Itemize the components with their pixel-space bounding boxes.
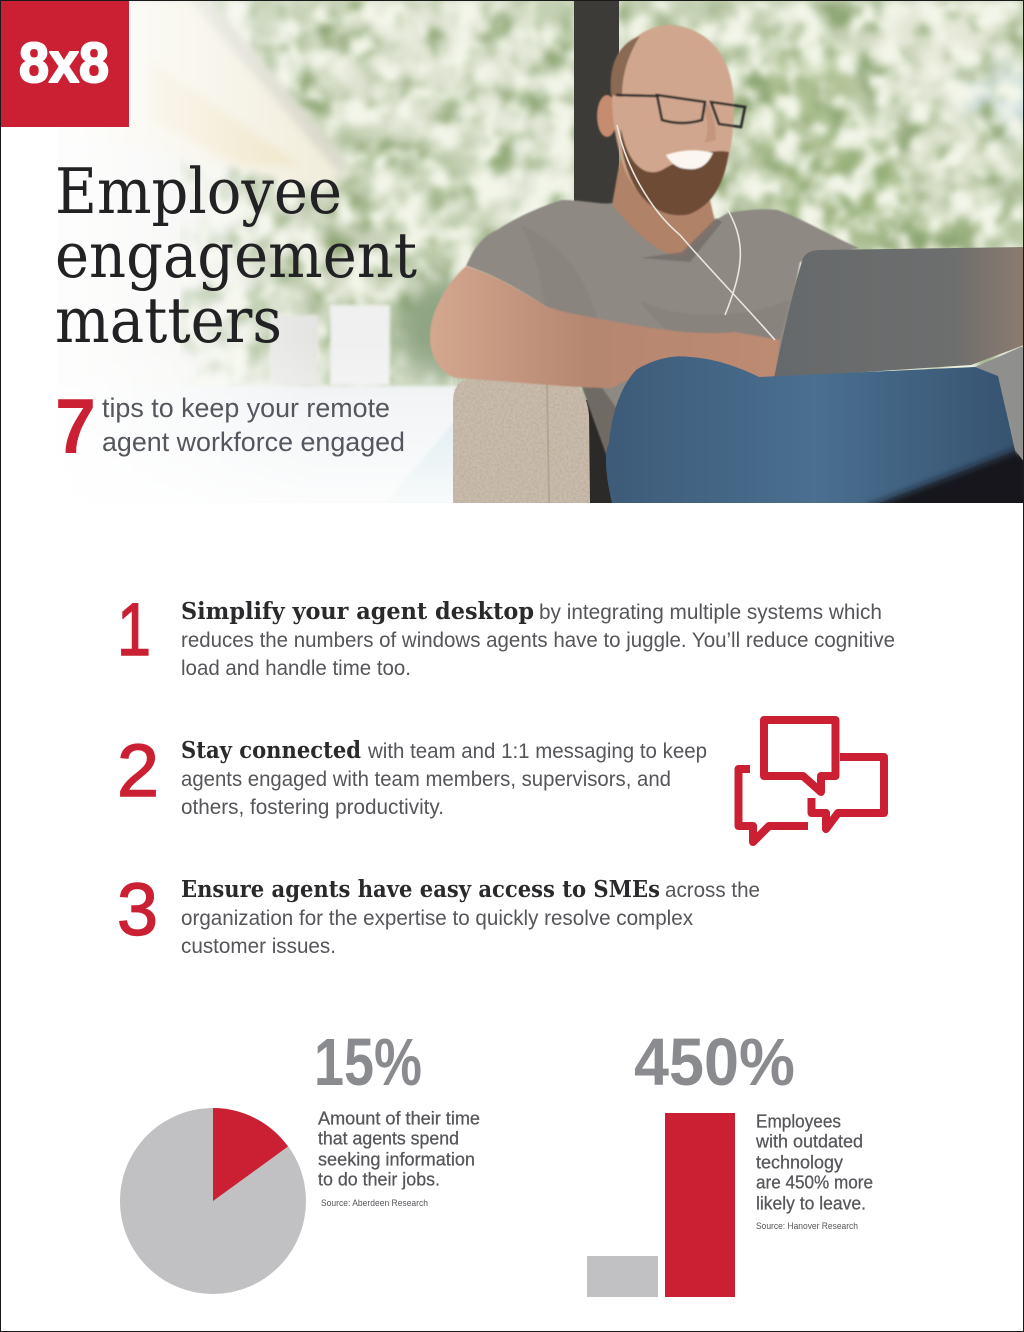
man: earphone cable [617, 125, 775, 340]
icon: chat bubbles [738, 720, 884, 842]
tip 2: 2 [117, 729, 159, 812]
title: engagement [55, 219, 417, 292]
tip 3: organization for the expertise to quickly resolve complex [181, 907, 693, 930]
stat: 450%: Employees [756, 1112, 841, 1132]
photo background: foliage through windows [57, 0, 1024, 503]
tip 1: 1 [117, 588, 151, 671]
tip 2: with team and 1:1 messaging to keep [367, 740, 707, 763]
stat: 15%: to do their jobs. [318, 1170, 440, 1190]
stat: 450%: Source: Hanover Research [756, 1221, 858, 1232]
tip 3 [117, 868, 760, 958]
logo: 8x8 [1, 0, 129, 127]
bar chart: 450% more likely to leave [587, 1113, 735, 1297]
tip 1: Simplify your agent desktop [181, 598, 534, 625]
stat: 15%: Amount of their time [318, 1108, 480, 1128]
floor and planter [230, 303, 458, 502]
darker foliage low on the left [388, 268, 466, 386]
stat: 450%: with outdated [755, 1132, 863, 1152]
tip 1: reduces the numbers of windows agents have to juggle. You’ll reduce cognitive [181, 629, 895, 652]
laptop [774, 247, 1024, 378]
stat: 450% [634, 1025, 873, 1232]
tip 3: across the [665, 879, 760, 902]
tip 2: others, fostering productivity. [181, 796, 444, 819]
subtitle: 7 tips: 7 [55, 382, 96, 470]
man: jeans [606, 347, 1024, 510]
white fade overlay [57, 1, 296, 473]
subtitle: 7 tips [55, 382, 405, 470]
hero photo: man with laptop [57, 0, 1024, 510]
tip 2 [117, 729, 707, 819]
leaf texture [180, 0, 1024, 390]
subtitle: 7 tips: tips to keep your remote [102, 393, 390, 423]
pie chart: 15% of time [120, 1108, 306, 1294]
man: shirt [466, 200, 859, 462]
stat: 15%: that agents spend [318, 1128, 459, 1148]
stat: 450%: likely to leave. [756, 1194, 866, 1214]
building: cream roof and white wall [129, 1, 342, 190]
title: Employee [55, 155, 342, 228]
tip 3: 3 [117, 868, 158, 951]
tip 2: Stay connected [181, 737, 361, 764]
stat: 15% [314, 1025, 480, 1209]
stat: 15%: 15% [314, 1025, 422, 1100]
tip 2: agents engaged with team members, supervisors, and [181, 768, 671, 791]
tip 3: customer issues. [181, 935, 336, 958]
stat: 450%: technology [756, 1152, 843, 1172]
tip 1: by integrating multiple systems which [539, 601, 882, 624]
stat: 15%: seeking information [318, 1150, 475, 1170]
tip 1: load and handle time too. [181, 657, 411, 680]
tip 1 [117, 588, 895, 680]
title [55, 155, 417, 357]
title: matters [55, 284, 282, 357]
sofa arm [453, 377, 625, 503]
window post [574, 1, 619, 204]
man: head and neck [597, 25, 745, 262]
subtitle: 7 tips: agent workforce engaged [102, 427, 405, 457]
man: arm and hand [430, 266, 780, 388]
stat: 450%: 450% [634, 1025, 795, 1100]
stat: 15%: Source: Aberdeen Research [321, 1198, 428, 1209]
logo: 8x8: 8x8 [19, 31, 109, 95]
stat: 450%: are 450% more [756, 1172, 873, 1192]
tip 3: Ensure agents have easy access to SMEs [181, 876, 660, 903]
